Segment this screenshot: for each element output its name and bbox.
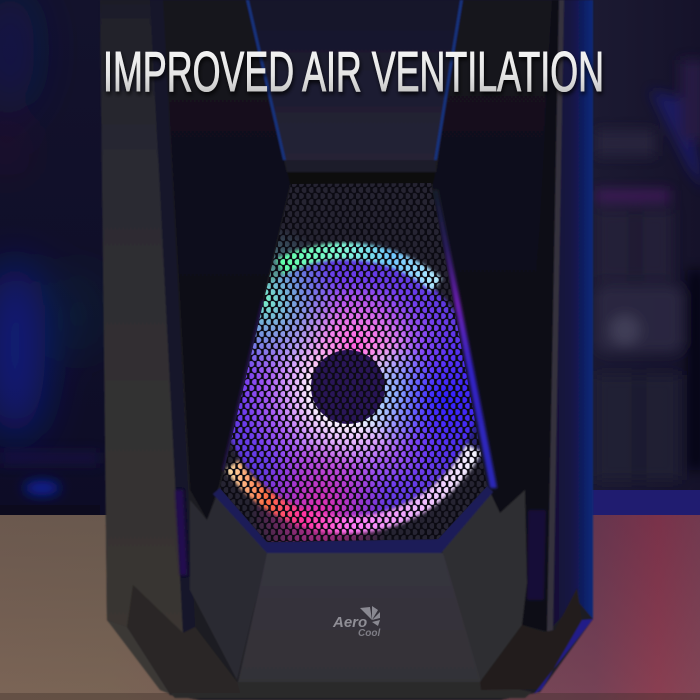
mesh backing plate [220,183,487,542]
case silhouette [100,0,593,700]
left side panel [100,0,183,633]
PC case body [100,0,593,700]
right corner blue edge [534,619,593,694]
bottom RGB ring arc [232,448,474,525]
fan light seen through perforations [220,183,487,542]
right stripe grey [547,0,564,632]
left outer facet [107,620,170,694]
left purple lit edge [222,300,265,470]
lit fan blades disc [219,257,479,517]
right corner facet [480,588,582,690]
wooden table [0,515,700,700]
right purple and blue lit edge [433,190,497,488]
magenta glow lower blades [253,446,386,542]
mesh lower blue lip [213,486,493,553]
right blue light line [434,0,463,160]
logo wordmark Aero: Aero [332,614,367,631]
blurred room background [0,0,700,516]
top centre panel [249,0,461,160]
dim top area behind mesh [220,183,487,542]
right front panel [432,0,552,513]
logo fan mark [360,606,380,626]
lower left front facet [190,488,267,680]
right dark channel [522,0,560,632]
blue glow on right blades [375,334,482,465]
mesh fan grille [220,183,487,542]
mesh frame top lip [285,160,436,174]
left dark groove [150,0,195,633]
left front panel [163,0,290,520]
pink glow above hub [302,289,408,380]
right blue side panel [548,0,593,632]
bottom lip [170,682,532,698]
fan hub [311,350,385,424]
AeroCool logo [332,606,380,639]
left corner facet [127,585,240,693]
logo wordmark Cool: Cool [358,628,380,639]
top RGB ring arc [280,251,437,285]
lower right front facet [440,486,527,682]
left blue light line [246,0,286,160]
centre lower trapezoid [238,553,481,682]
cyan glow right of hub [358,349,432,438]
teal glow top left [248,230,334,370]
